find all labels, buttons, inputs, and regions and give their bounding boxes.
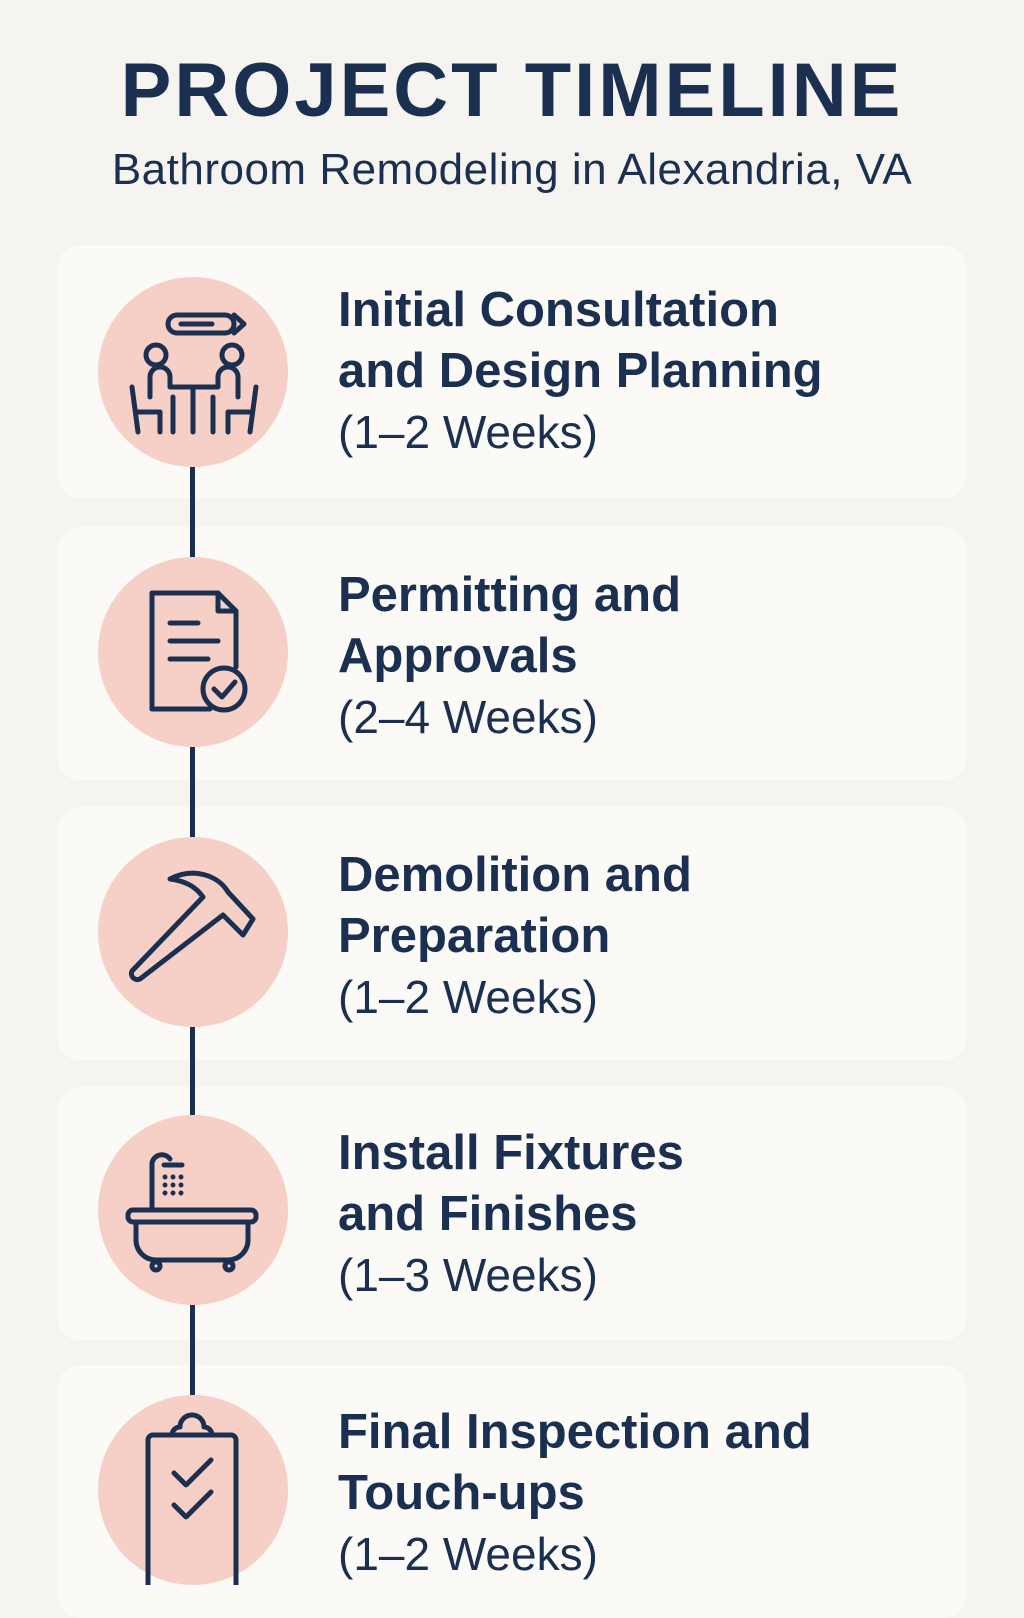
- text: step 1: Initial Consultation: [338, 283, 779, 337]
- card 5: [58, 1365, 966, 1618]
- text: step 5: Final Inspection and: [338, 1405, 812, 1459]
- icon: consultation: [98, 277, 288, 467]
- text: step 2: Permitting and: [338, 568, 681, 622]
- icon: document: [98, 557, 288, 747]
- connector line: [190, 460, 195, 1420]
- card 3: [58, 807, 966, 1060]
- text: step 2: (2–4 Weeks): [338, 691, 598, 743]
- text: step 3: (1–2 Weeks): [338, 971, 598, 1023]
- card 1: [58, 245, 966, 498]
- text: step 1: [338, 283, 823, 458]
- text: step 4: [338, 1126, 684, 1301]
- text: step 5: [338, 1405, 812, 1580]
- text: step 4: (1–3 Weeks): [338, 1249, 598, 1301]
- text: step 2: Approvals: [338, 629, 578, 683]
- icon: hammer: [98, 837, 288, 1027]
- title: PROJECT TIMELINE: [121, 48, 903, 133]
- icon: bathtub: [98, 1115, 288, 1305]
- card 2: [58, 527, 966, 780]
- text: step 1: (1–2 Weeks): [338, 406, 598, 458]
- card 4: [58, 1087, 966, 1340]
- text: step 5: (1–2 Weeks): [338, 1528, 598, 1580]
- text: step 1: and Design Planning: [338, 344, 823, 398]
- text: step 5: Touch-ups: [338, 1466, 585, 1520]
- text: step 4: and Finishes: [338, 1187, 638, 1241]
- text: step 3: Demolition and: [338, 848, 692, 902]
- subtitle: Bathroom Remodeling in Alexandria, VA: [112, 145, 912, 194]
- text: step 3: Preparation: [338, 909, 610, 963]
- icon: clipboard: [98, 1395, 288, 1585]
- text: step 3: [338, 848, 692, 1023]
- text: step 4: Install Fixtures: [338, 1126, 684, 1180]
- text: step 2: [338, 568, 681, 743]
